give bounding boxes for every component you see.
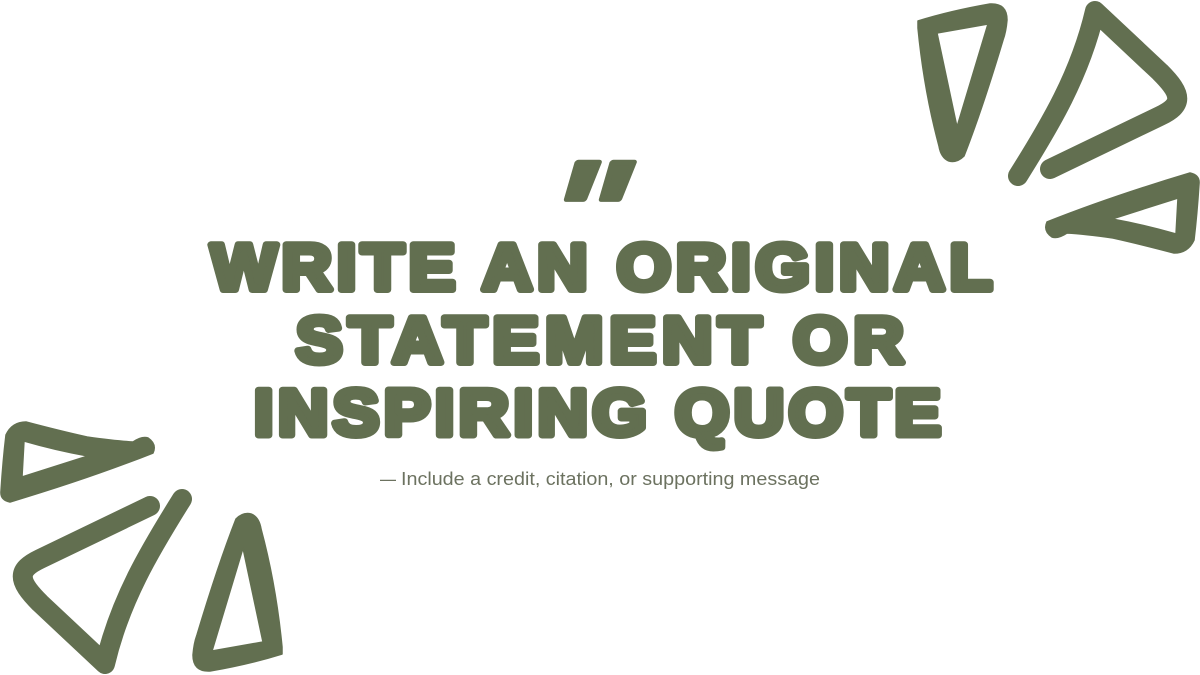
icon: flat triangle (1046, 173, 1199, 253)
heading: quote: INSPIRING QUOTE (254, 377, 941, 449)
icon: narrow triangle (918, 4, 1007, 161)
attribution text: — (380, 468, 396, 489)
heading: quote: WRITE AN ORIGINAL (211, 232, 992, 304)
icon: open triangle (23, 499, 182, 664)
decoration: top-right triangles (918, 4, 1199, 253)
icon: narrow triangle (193, 514, 282, 671)
quotation mark: '' (524, 132, 650, 293)
heading: quote: STATEMENT OR (296, 305, 904, 377)
heading: quote (211, 232, 992, 449)
icon: flat triangle (1, 422, 154, 502)
attribution text: Include a credit, citation, or supporting message (401, 468, 820, 489)
icon: open triangle (1018, 11, 1177, 176)
decoration: bottom-left triangles (1, 422, 282, 671)
